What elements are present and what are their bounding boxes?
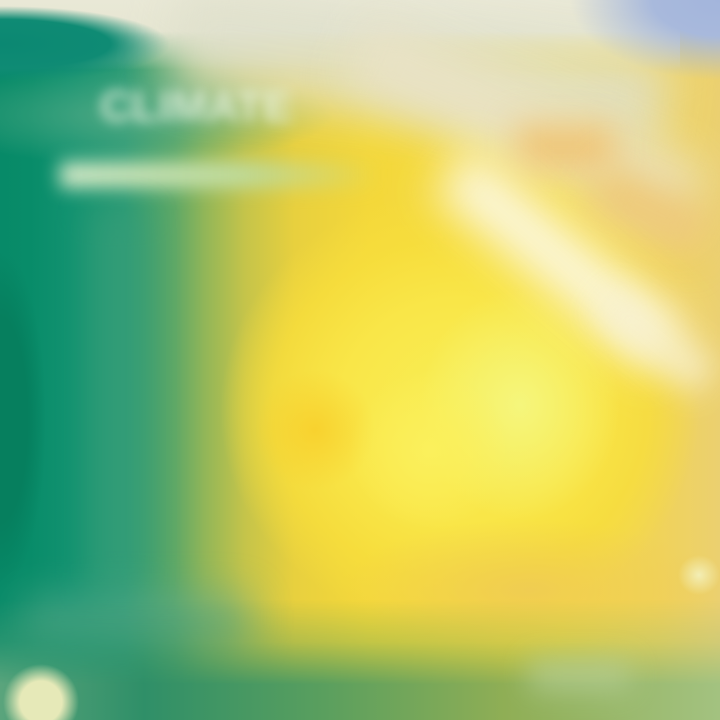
footer highlight	[530, 660, 630, 690]
cloud wash at top right	[342, 18, 708, 232]
top cloud area	[0, 0, 680, 70]
title: blurred heading: CLIMATE	[100, 82, 292, 131]
faint lower left panel	[20, 595, 250, 645]
pale highlight at right of sun	[420, 290, 620, 520]
yellow sun glow	[220, 190, 700, 630]
bright highlight at sun centre	[350, 370, 510, 530]
orange patch at right edge	[585, 162, 715, 258]
dark green vertical band at left	[0, 250, 46, 590]
blue sky in top right corner	[570, 0, 720, 80]
footer: dark green strip	[0, 600, 720, 720]
amber area at lower right	[340, 520, 720, 660]
subtitle: blurred light bar	[60, 162, 380, 188]
teal band at top left	[0, 6, 200, 82]
orange patch among clouds	[515, 125, 615, 170]
faint vertical column at left	[90, 210, 145, 590]
second diagonal light streak	[591, 284, 719, 396]
orange-yellow glow at left of sun	[255, 370, 375, 490]
footer logo: pale circle at bottom left	[3, 664, 79, 720]
pale spot at right edge	[678, 555, 720, 595]
white diagonal light streak	[433, 145, 687, 373]
grey cloud band across upper centre	[165, 0, 675, 154]
soft teal panel behind title	[0, 65, 340, 165]
